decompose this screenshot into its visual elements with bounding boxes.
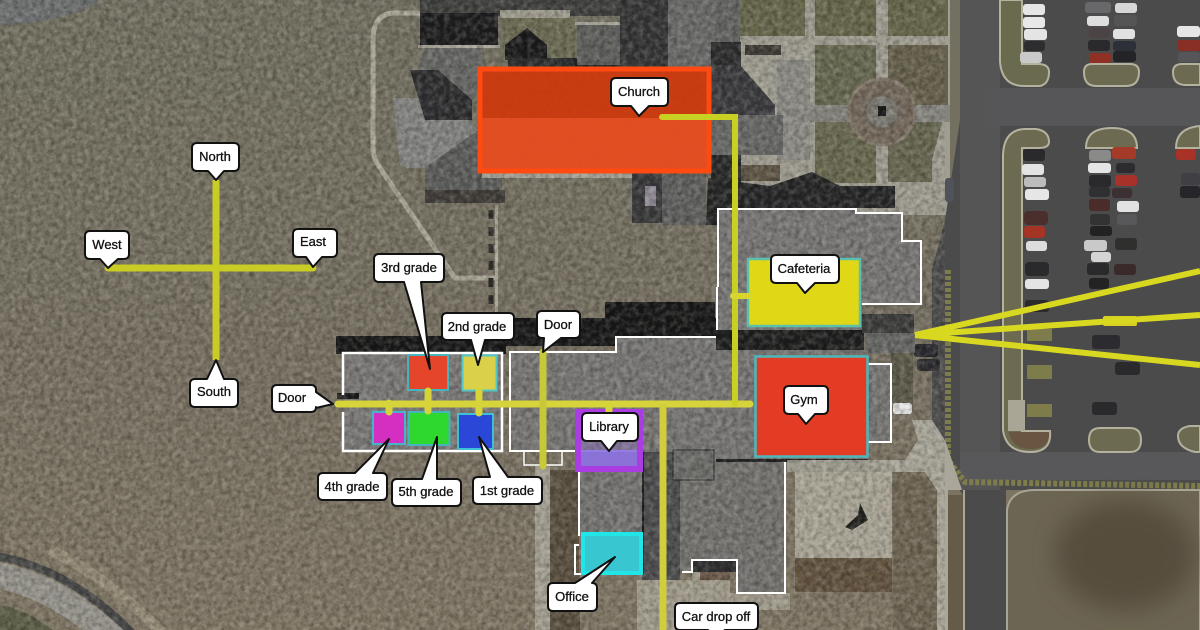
room highlight: 4th grade	[373, 412, 405, 444]
callout: South	[190, 360, 238, 407]
cafeteria building	[717, 209, 921, 330]
callout labels	[85, 78, 839, 630]
church highlight	[478, 67, 711, 173]
south wing and library block	[579, 450, 790, 630]
callout: Church: Church	[618, 84, 660, 99]
central building	[509, 337, 891, 462]
room highlight: office	[583, 534, 641, 573]
callout: 1st grade	[473, 437, 542, 504]
church corridor	[662, 117, 735, 404]
callout: Office: Office	[555, 589, 589, 604]
room highlight: cafeteria	[748, 259, 860, 326]
callout: West: West	[92, 237, 122, 252]
callout: Library	[582, 413, 638, 451]
callout: East: East	[300, 234, 326, 249]
callout: 1st grade: 1st grade	[480, 483, 534, 498]
callout: 2nd grade	[442, 313, 514, 365]
callout: Car drop off	[675, 603, 758, 630]
callout: North	[192, 143, 239, 180]
callout: Cafeteria	[771, 255, 839, 293]
callout: North: North	[199, 149, 231, 164]
room highlight: 3rd grade	[408, 355, 448, 390]
callout: South: South	[197, 384, 231, 399]
church plaza	[740, 0, 950, 215]
callout: Gym	[784, 386, 828, 424]
callout: Office	[548, 557, 615, 611]
room highlight: 5th grade	[408, 412, 450, 445]
side door corridor	[540, 352, 546, 466]
main corridor	[338, 400, 750, 408]
cafeteria branch	[733, 293, 750, 299]
callout: Door north: Door	[544, 317, 573, 332]
entrance lines fanning east	[915, 271, 1200, 365]
classroom stubs	[389, 391, 609, 413]
callout: Cafeteria: Cafeteria	[778, 261, 831, 276]
room highlight: 1st grade	[458, 414, 493, 449]
callout: Door north	[537, 311, 580, 352]
callout: 5th grade: 5th grade	[399, 484, 453, 499]
walking paths and bottom-left road	[0, 13, 550, 630]
callout: 3rd grade	[374, 254, 444, 369]
callout: 4th grade	[318, 439, 389, 500]
yellow route lines	[108, 117, 1200, 630]
callout: West	[85, 231, 129, 268]
room highlight: library	[578, 412, 640, 469]
callout: 5th grade	[392, 437, 461, 506]
parking lot and roads	[932, 0, 1200, 630]
callout: Door west	[272, 385, 333, 412]
room highlight: 2nd grade	[462, 356, 496, 390]
callout: 4th grade: 4th grade	[325, 479, 379, 494]
west classroom wing	[337, 353, 502, 451]
compass cross	[108, 180, 313, 360]
car drop off lane	[660, 404, 666, 630]
playground and east grounds	[787, 420, 962, 630]
white roof outlines	[343, 209, 921, 593]
building shadows	[336, 302, 915, 403]
callout: Church	[611, 78, 668, 116]
callout: 2nd grade: 2nd grade	[448, 319, 506, 334]
callout: 3rd grade: 3rd grade	[381, 260, 437, 275]
callout: Car drop off: Car drop off	[682, 609, 751, 624]
grain texture	[0, 0, 945, 630]
callout: Gym: Gym	[790, 392, 818, 407]
parked cars	[893, 2, 1200, 415]
callout: Door west: Door	[278, 390, 307, 405]
callout: East	[293, 229, 337, 267]
callout: Library: Library	[589, 419, 629, 434]
room highlight: gym	[756, 356, 868, 456]
church complex roofs	[393, 0, 895, 225]
